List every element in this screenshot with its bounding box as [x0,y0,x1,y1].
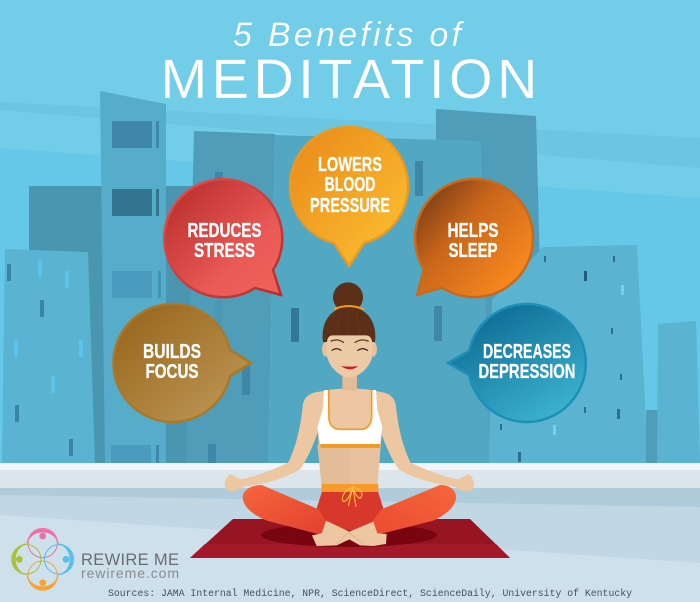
meditating woman [225,282,474,546]
bubble: decreases depression: DEPRESSION [478,361,576,383]
bubble: lowers blood pressure: BLOOD [324,174,376,196]
bubble: helps sleep: HELPS [448,220,498,242]
petal: green [12,543,41,575]
bubble: reduces stress: STRESS [194,240,255,262]
white sports top [317,390,382,448]
head [322,306,377,378]
bubble: builds focus: BUILDS [143,341,201,363]
logo mark [12,528,74,590]
bubble: reduces stress [164,179,282,297]
rooftop floor [0,463,700,602]
bubble: builds focus [113,304,251,422]
crossed feet [312,521,387,546]
bubble: builds focus: FOCUS [146,361,198,383]
title: MEDITATION [160,47,538,110]
petal: blue [44,543,74,575]
torso [317,372,382,487]
logo website: rewireme.com [81,565,179,581]
arms [225,392,474,491]
skyline buildings [2,91,700,463]
bubble: decreases depression [448,304,586,422]
bubble: helps sleep: SLEEP [448,240,498,262]
petal: pink [27,528,59,558]
hair bun [333,282,363,312]
bubble: lowers blood pressure: PRESSURE [310,195,390,217]
bubble: lowers blood pressure [290,127,408,266]
title [160,16,538,110]
petal: orange [27,561,59,590]
logo: rewire me [12,528,179,590]
bubble: lowers blood pressure: LOWERS [318,154,382,176]
bubble: helps sleep [415,179,533,297]
title: 5 Benefits of [233,16,465,54]
red trousers [243,484,456,535]
sources: Sources: JAMA Internal Medicine, NPR, ScienceDirect, ScienceDaily, University of Kentucky [108,588,632,599]
bubble: reduces stress: REDUCES [188,220,262,242]
logo name: REWIRE ME [81,551,179,569]
bubble: decreases depression: DECREASES [483,341,571,363]
yoga mat [190,519,510,558]
